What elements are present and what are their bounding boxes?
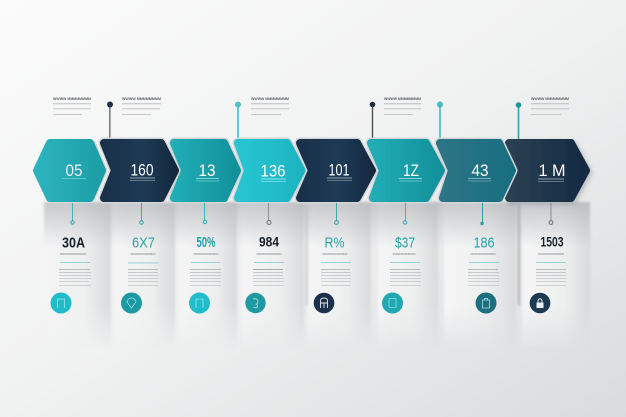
column 7 <box>468 203 499 286</box>
arrow 7 <box>440 143 512 198</box>
column 2: 6X7 <box>132 234 155 252</box>
arrow 4: 136 <box>260 162 286 180</box>
column 3: 50% <box>196 235 216 251</box>
top note 1 <box>53 97 91 115</box>
icon 5 <box>314 293 334 313</box>
column 4: 984 <box>259 234 279 250</box>
column 6: $37 <box>395 236 415 252</box>
column 4: MMMMMMMMMMMMM <box>256 252 282 256</box>
top note 1: WWWW MMMMMMMM <box>53 97 91 101</box>
column 3 <box>190 203 221 286</box>
column 8: 1503 <box>540 234 564 250</box>
column 5 <box>321 203 351 286</box>
pin: navy 1 <box>107 102 113 139</box>
column 8 <box>536 203 566 286</box>
arrow 2 <box>104 143 175 198</box>
top note 5: WWWW MMMMMMMM <box>531 97 569 101</box>
arrow 3 <box>174 143 237 198</box>
top note 3: WWWW MMMMMMMM <box>251 97 289 101</box>
pin: teal 5 <box>516 102 521 139</box>
arrow 6: 1Z <box>403 162 419 180</box>
top note 4: WWWW MMMMMMMM <box>384 97 421 101</box>
top note 5 <box>531 97 569 115</box>
column 8: MMMMMMMMMMMMM <box>538 252 564 256</box>
arrow 3: 13 <box>198 162 216 180</box>
column 2 <box>128 203 158 286</box>
column 4 <box>253 203 284 286</box>
top note 3 <box>251 97 289 115</box>
top note 2 <box>122 97 161 115</box>
icon 8 <box>530 293 550 313</box>
column 1: MMMMMMMMMMMMM <box>60 252 86 256</box>
column 1 <box>59 203 91 286</box>
top note 4 <box>384 97 421 115</box>
column 1: 30A <box>62 234 85 252</box>
column 2: MMMMMMMMMMMMM <box>130 252 156 256</box>
arrow 5 <box>300 143 372 198</box>
arrow 2: 160 <box>130 160 154 180</box>
pin: teal 4 <box>437 102 443 139</box>
pin: navy 3 <box>370 102 375 139</box>
column 7: 186 <box>474 234 494 252</box>
arrow 4 <box>238 143 302 198</box>
arrow 8 <box>509 143 586 198</box>
icon 6 <box>382 292 403 314</box>
icon 7 <box>476 292 496 314</box>
icon 2 <box>121 292 142 314</box>
arrow 8: 1 M <box>538 161 566 180</box>
arrow 6 <box>371 143 441 198</box>
column 3: MMMMMMMMMMMMM <box>194 252 219 256</box>
arrow 1: 05 <box>66 162 82 180</box>
column 7: MMMMMMMMMMMMM <box>470 252 496 256</box>
top note 2: WWWW MMMMMMMM <box>122 97 161 101</box>
arrow 7: 43 <box>472 162 488 180</box>
arrow 1 <box>37 143 102 198</box>
column 6: MMMMMMMMMMMMM <box>392 252 416 256</box>
icon 4 <box>245 293 266 313</box>
column 5: R% <box>324 236 345 252</box>
column 6 <box>390 203 421 286</box>
icon 1 <box>50 292 72 314</box>
arrow 5: 101 <box>328 162 350 180</box>
column 5: MMMMMMMMMMMMM <box>322 252 348 256</box>
icon 3 <box>189 292 210 314</box>
pin: teal 2 <box>235 102 241 139</box>
panel: column backgrounds <box>43 200 591 333</box>
